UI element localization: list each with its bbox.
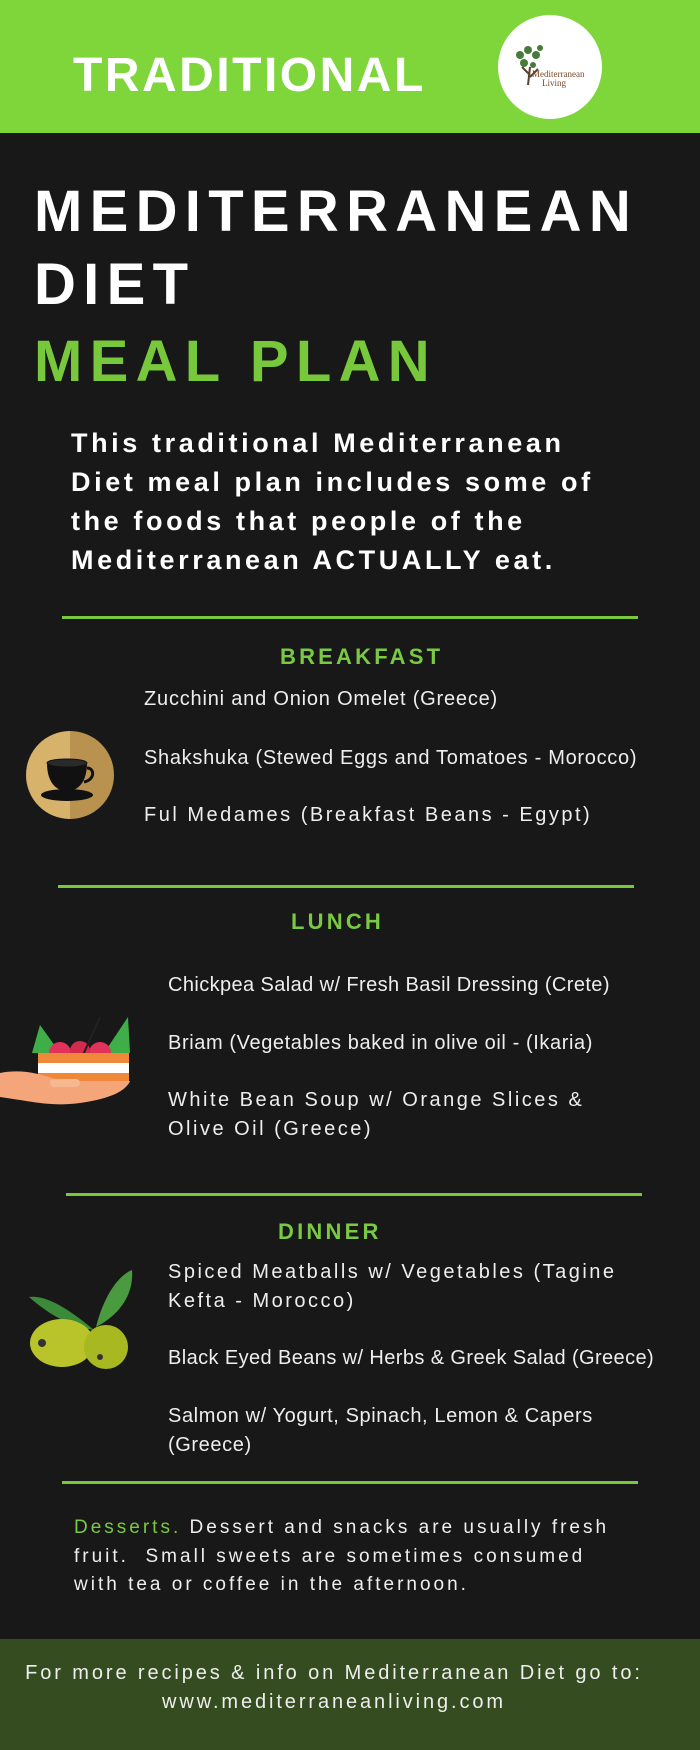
icon: coffee cup bbox=[26, 731, 114, 819]
item list: lunch: White Bean Soup w/ Orange Slices & bbox=[168, 1089, 584, 1111]
item list: dinner: Spiced Meatballs w/ Vegetables (Tagine bbox=[168, 1261, 617, 1283]
footer text: For more recipes & info on Mediterranean Diet go to: bbox=[25, 1662, 643, 1684]
item list: lunch: Briam (Vegetables baked in olive oil - (Ikaria) bbox=[168, 1032, 593, 1054]
panel: breakfast bbox=[26, 644, 637, 826]
intro paragraph: the foods that people of the bbox=[71, 506, 526, 536]
header band bbox=[0, 0, 700, 133]
footer bbox=[0, 1639, 700, 1750]
item list: dinner: Salmon w/ Yogurt, Spinach, Lemon & Capers bbox=[168, 1405, 593, 1427]
header text: TRADITIONAL: TRADITIONAL bbox=[73, 49, 426, 102]
title: DIET bbox=[34, 252, 195, 317]
intro paragraph: Mediterranean ACTUALLY eat. bbox=[71, 545, 556, 575]
item list: dinner: (Greece) bbox=[168, 1434, 252, 1456]
item list: breakfast bbox=[144, 688, 637, 826]
item list: lunch: Olive Oil (Greece) bbox=[168, 1118, 373, 1140]
heading: lunch: LUNCH bbox=[291, 909, 384, 934]
intro paragraph bbox=[71, 428, 594, 575]
item list: breakfast: Zucchini and Onion Omelet (Greece) bbox=[144, 688, 498, 710]
footer text bbox=[25, 1662, 643, 1713]
logo circle: Living bbox=[542, 78, 566, 88]
icon: olives bbox=[29, 1270, 132, 1369]
item list: dinner: Black Eyed Beans w/ Herbs & Greek Salad (Greece) bbox=[168, 1347, 654, 1369]
heading: dinner: DINNER bbox=[278, 1219, 382, 1244]
item list: lunch: Chickpea Salad w/ Fresh Basil Dressing (Crete) bbox=[168, 974, 610, 996]
desserts note: with tea or coffee in the afternoon. bbox=[74, 1574, 469, 1595]
intro paragraph: Diet meal plan includes some of bbox=[71, 467, 594, 497]
icon: hand holding salad bowl bbox=[0, 1017, 130, 1104]
logo circle bbox=[498, 15, 602, 119]
panel: dinner bbox=[29, 1219, 654, 1456]
item list: lunch bbox=[168, 974, 610, 1140]
title bbox=[34, 179, 638, 394]
item list: dinner bbox=[168, 1261, 654, 1456]
title: MEDITERRANEAN bbox=[34, 179, 638, 244]
footer text: www.mediterraneanliving.com bbox=[162, 1691, 506, 1713]
title: MEAL PLAN bbox=[34, 329, 437, 394]
panel: lunch bbox=[0, 909, 610, 1140]
logo circle: Mediterranean bbox=[532, 69, 585, 79]
item list: breakfast: Shakshuka (Stewed Eggs and Tomatoes - Morocco) bbox=[144, 747, 637, 769]
desserts note: fruit. Small sweets are sometimes consumed bbox=[74, 1546, 585, 1566]
desserts note bbox=[74, 1517, 609, 1595]
desserts note: Desserts. Dessert and snacks are usually fresh bbox=[74, 1517, 609, 1538]
heading: breakfast: BREAKFAST bbox=[280, 644, 443, 669]
item list: dinner: Kefta - Morocco) bbox=[168, 1290, 356, 1312]
intro paragraph: This traditional Mediterranean bbox=[71, 428, 565, 458]
item list: breakfast: Ful Medames (Breakfast Beans - Egypt) bbox=[144, 804, 592, 826]
